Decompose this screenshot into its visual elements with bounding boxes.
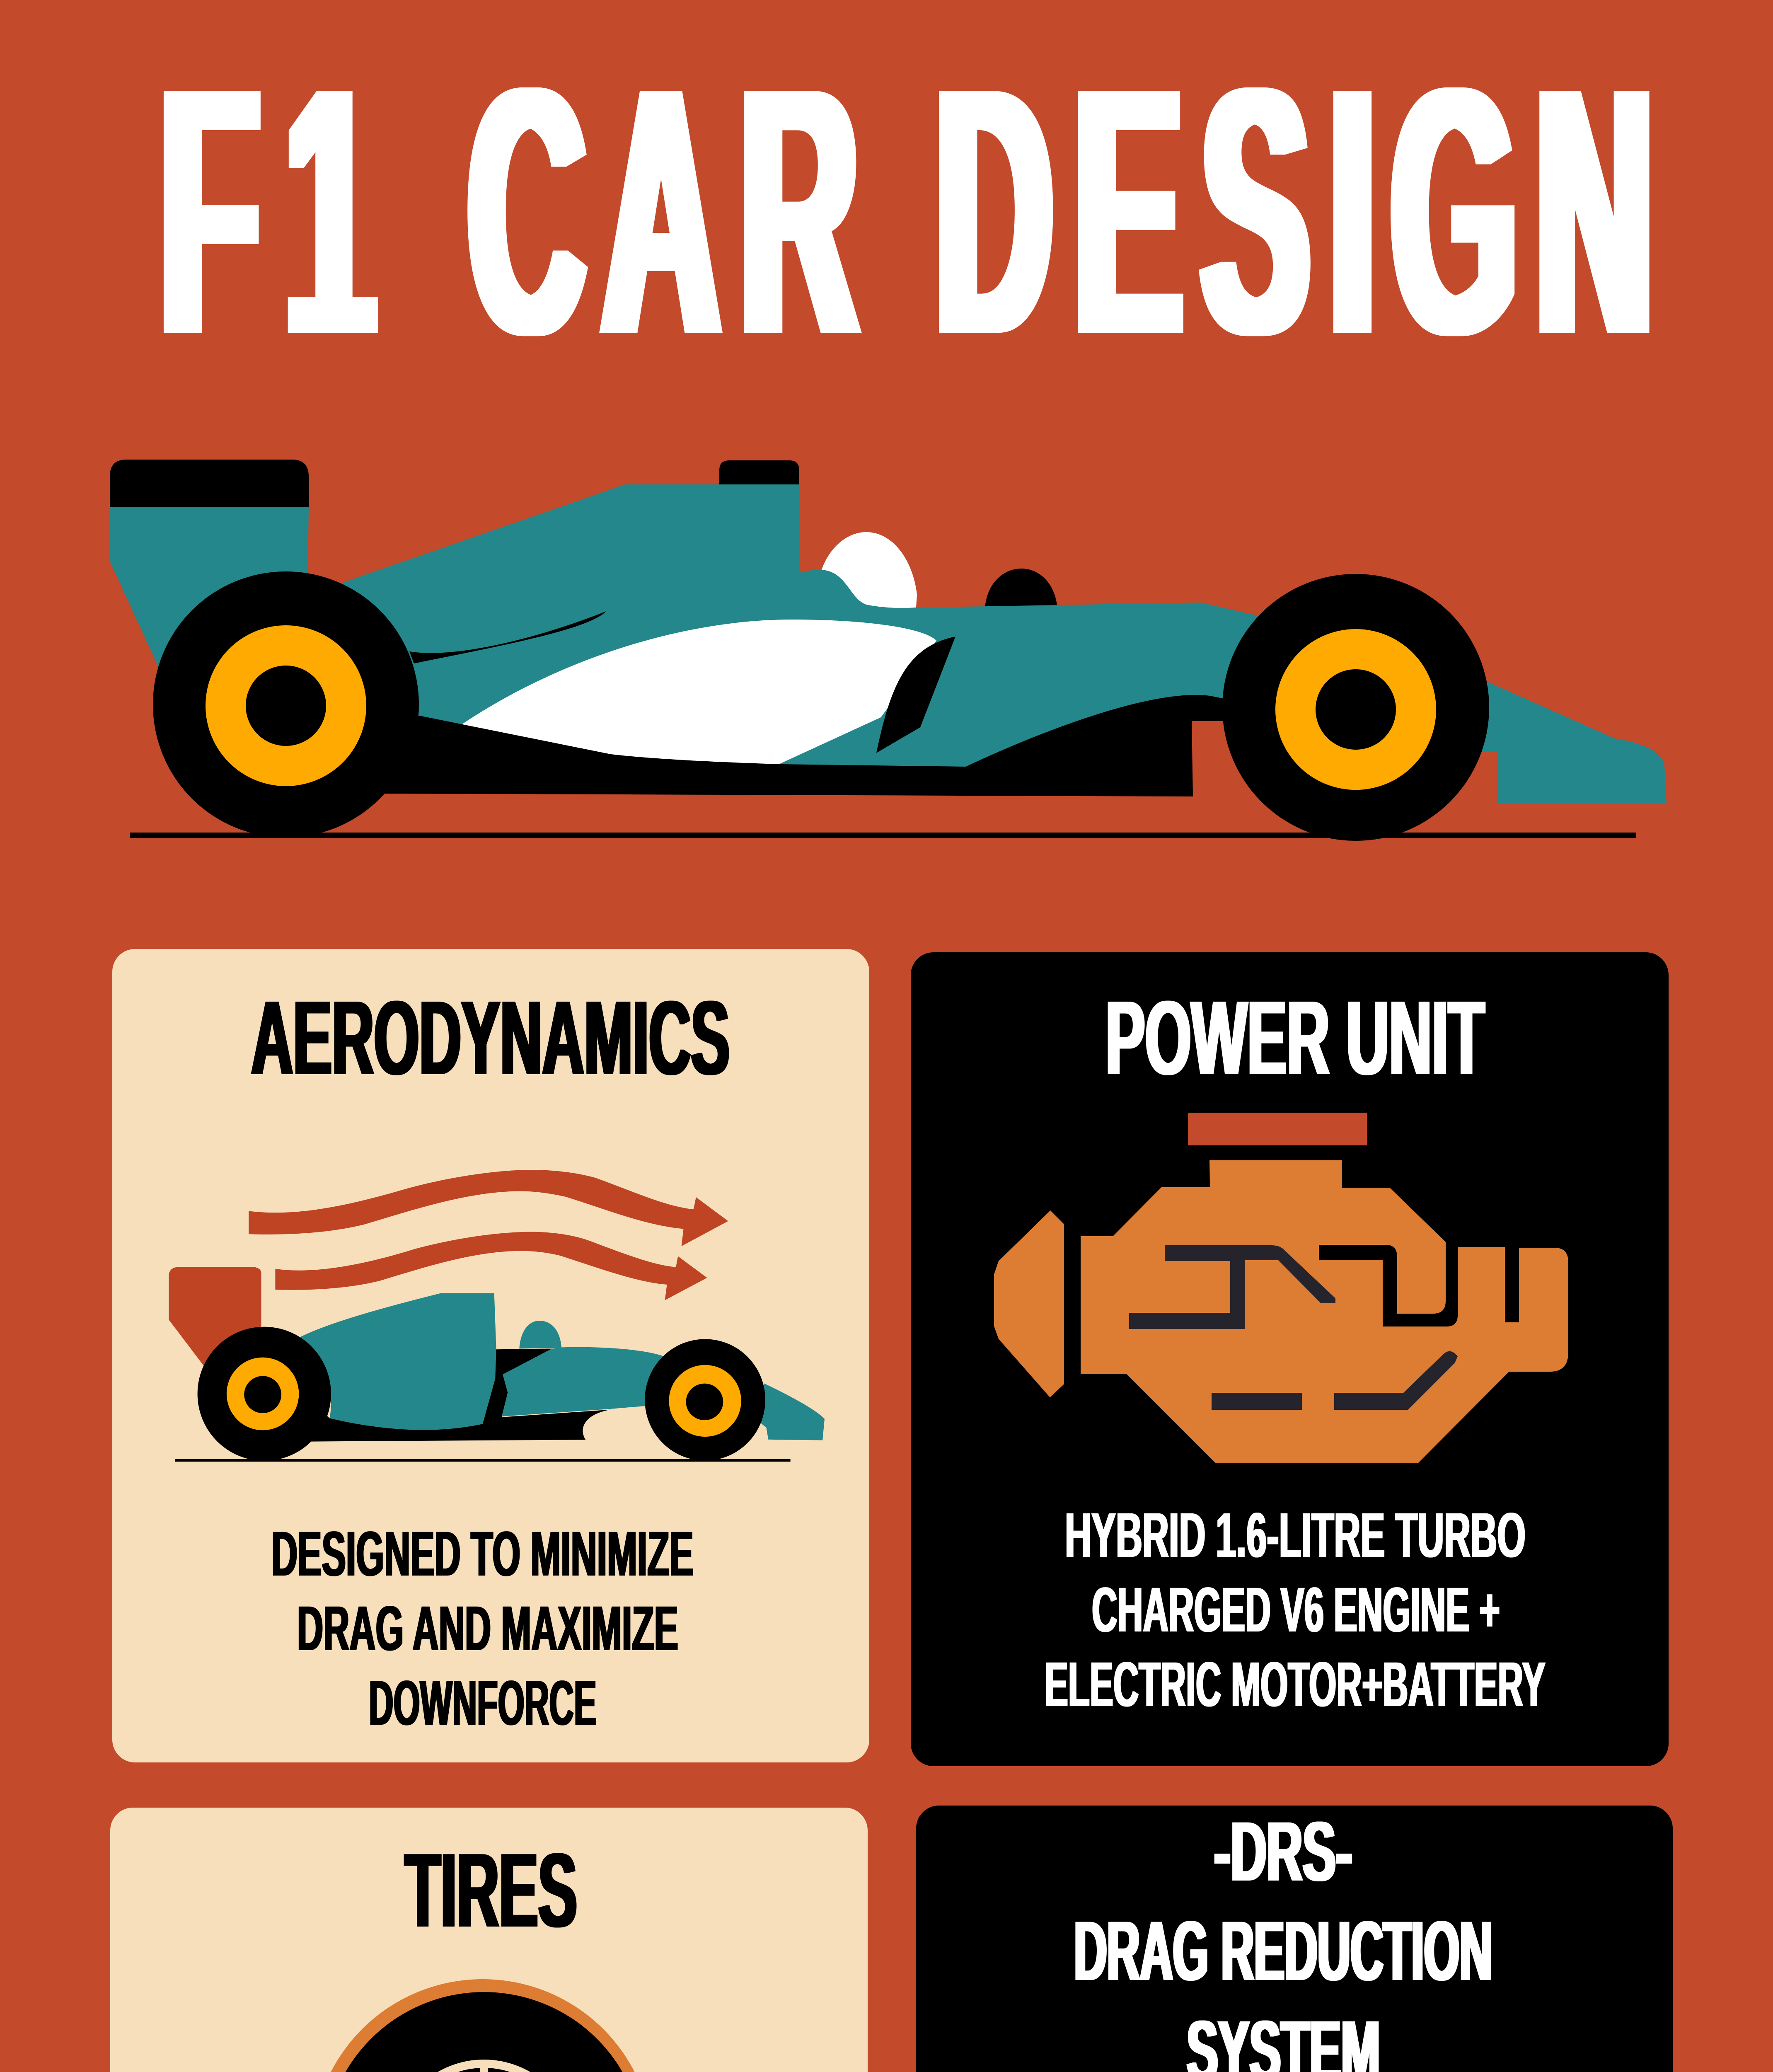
heading: DRS: -DRS-	[1214, 1804, 1352, 1899]
panel: aerodynamics	[112, 949, 869, 1762]
illustration: small car	[169, 1267, 825, 1462]
icon: tire	[312, 1979, 653, 2072]
text: power unit description	[1045, 1500, 1546, 1720]
icon: engine	[994, 1113, 1568, 1463]
heading: power unit: POWER UNIT	[1105, 979, 1485, 1097]
panel: tires	[110, 1808, 868, 2072]
heading: tires: TIRES	[405, 1831, 577, 1949]
panel: DRS	[916, 1804, 1673, 2072]
text: aerodynamics description: DRAG AND MAXIMIZE	[297, 1593, 678, 1664]
illustration: main F1 car	[110, 460, 1667, 841]
icon: airflow arrows	[249, 1170, 728, 1300]
text: aerodynamics description	[271, 1518, 694, 1738]
heading: aerodynamics: AERODYNAMICS	[251, 979, 730, 1097]
heading: DRS	[1074, 1804, 1492, 2072]
text: aerodynamics description: DESIGNED TO MINIMIZE	[271, 1518, 694, 1589]
text: aerodynamics description: DOWNFORCE	[369, 1668, 597, 1738]
panel: power unit	[911, 952, 1669, 1766]
title: F1 CAR DESIGN	[160, 15, 1653, 407]
